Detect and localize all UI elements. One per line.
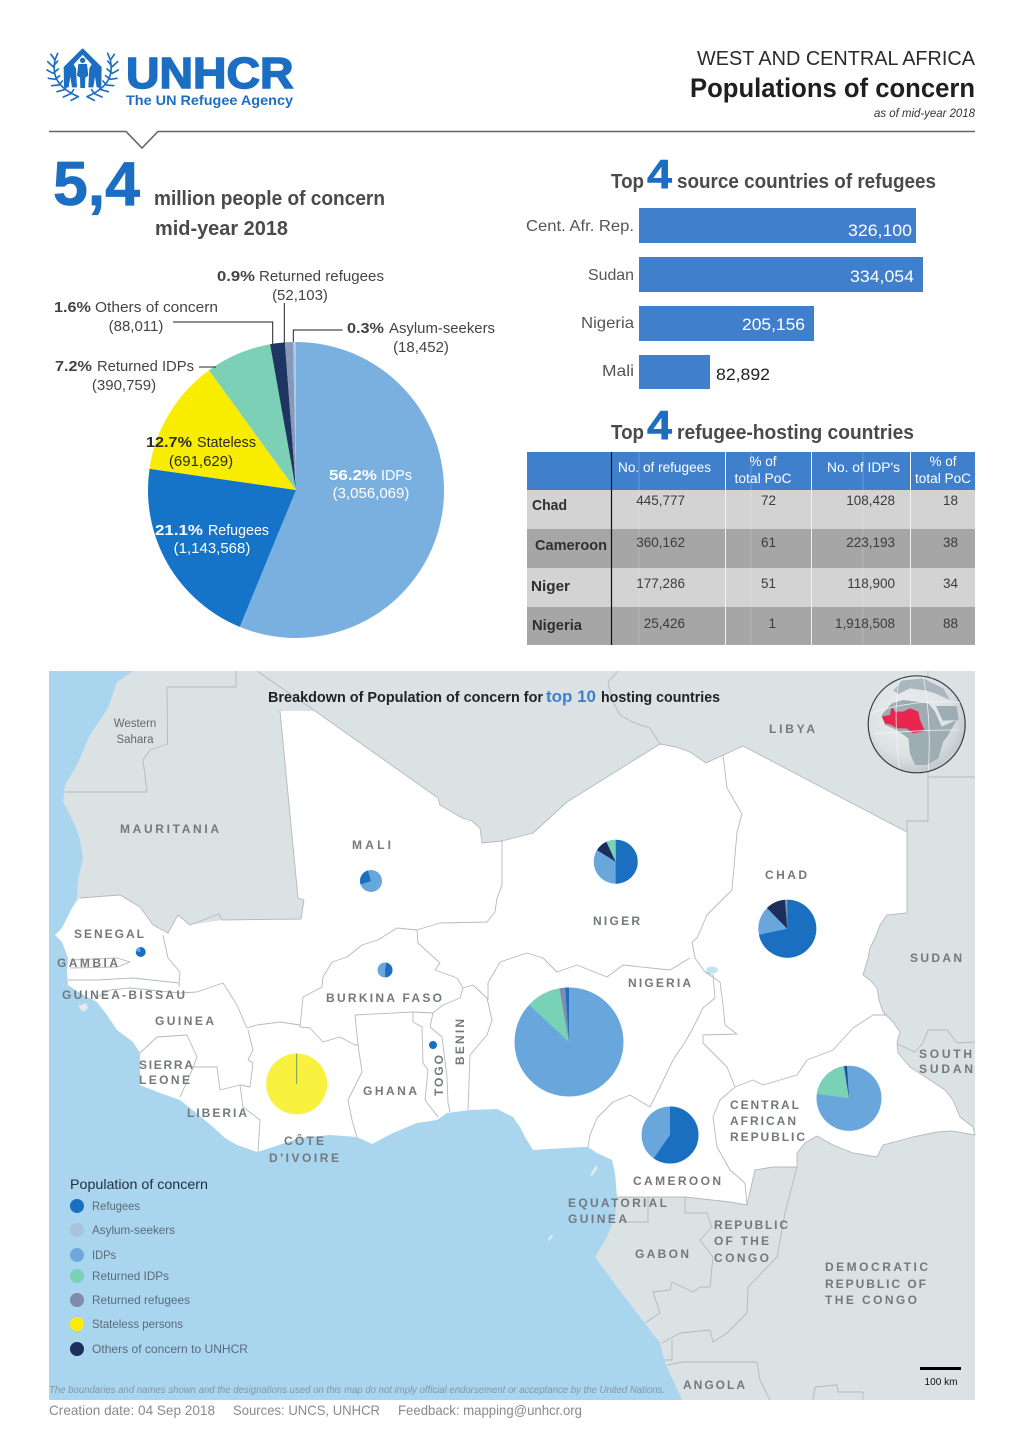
legend item: Returned IDPs: Returned IDPs — [92, 1269, 169, 1283]
country labels: CÔTE — [284, 1133, 324, 1148]
country labels: BURKINA FASO — [326, 991, 442, 1005]
bar: Mali — [602, 355, 770, 389]
legend item: Returned refugees: Returned refugees — [92, 1293, 190, 1307]
country labels: DEMOCRATIC — [825, 1260, 928, 1274]
bar chart heading: top 4 source countries — [611, 151, 936, 197]
country labels: SENEGAL — [74, 927, 144, 941]
bar: Mali: Mali — [602, 363, 634, 380]
country labels: BENIN — [453, 1019, 467, 1065]
logo tagline: The UN Refugee Agency — [126, 92, 293, 108]
map: borders — [65, 671, 975, 1400]
slice: Asylum-seekers — [293, 342, 296, 490]
legend item: Stateless persons: Stateless persons — [92, 1317, 183, 1331]
label: IDPs: 56.2% — [329, 467, 377, 484]
country labels: GABON — [635, 1247, 689, 1261]
country labels: GUINEA — [568, 1212, 627, 1226]
label: Returned refugees — [217, 268, 384, 304]
legend item: Refugees — [70, 1199, 140, 1213]
bar chart heading: top 4 source countries: 4 — [647, 151, 672, 197]
label: Returned refugees: Returned refugees — [259, 268, 384, 285]
legend item: Others of concern: Others of concern to UNHCR — [92, 1342, 248, 1356]
row: Niger: 51 — [761, 576, 776, 591]
footer — [49, 1402, 582, 1418]
label: Returned refugees: (52,103) — [272, 287, 328, 304]
label: Others of concern: (88,011) — [109, 318, 163, 335]
mini pie: Niger — [594, 840, 638, 884]
country labels: REPUBLIC — [714, 1218, 788, 1232]
country labels: GHANA — [363, 1084, 417, 1098]
map panel — [49, 671, 975, 1400]
label: IDPs: IDPs — [381, 467, 412, 484]
bar chart heading: top 4 source countries: source countries of refugees — [677, 170, 936, 193]
row: Nigeria: 88 — [943, 616, 958, 631]
country labels: SUDAN — [919, 1062, 973, 1076]
label: Others of concern: Others of concern — [95, 299, 218, 316]
country labels: SOUTH — [919, 1047, 972, 1061]
country labels: MAURITANIA — [120, 822, 219, 836]
label: Refugees: 21.1% — [155, 522, 203, 539]
leader lines — [173, 303, 343, 367]
country labels: GUINEA — [155, 1014, 214, 1028]
table header text: total PoC — [734, 471, 792, 486]
bar chart heading: top 4 source countries: Top — [611, 170, 644, 193]
table header text: No. of refugees — [618, 460, 711, 475]
legend — [70, 1176, 248, 1356]
country labels: CHAD — [765, 868, 807, 882]
country labels: TOGO — [432, 1055, 446, 1096]
legend item: Refugees: Refugees — [92, 1199, 140, 1213]
row: Cameroon: 38 — [943, 535, 958, 550]
country labels: D'IVOIRE — [269, 1151, 339, 1165]
islands — [78, 1003, 598, 1241]
label: Asylum-seekers: Asylum-seekers — [389, 320, 495, 337]
country labels: LIBYA — [769, 722, 815, 736]
legend item: IDPs — [70, 1248, 116, 1262]
country labels: Western — [114, 718, 156, 730]
bar: Nigeria: Nigeria — [581, 315, 634, 332]
map title: hosting countries — [601, 689, 720, 706]
country labels: NIGER — [593, 914, 640, 928]
map title: Breakdown of Population of concern for — [268, 689, 543, 706]
country labels: GUINEA-BISSAU — [62, 988, 185, 1002]
mini pie: Senegal — [136, 947, 146, 957]
row: Chad: Chad — [532, 497, 567, 514]
label: Asylum-seekers: 0.3% — [347, 320, 384, 337]
date note: as of mid-year 2018 — [874, 108, 976, 120]
footer: Sources: UNCS, UNHCR — [233, 1402, 380, 1418]
key figure date: mid-year 2018 — [155, 217, 288, 240]
slice: Returned refugees — [285, 342, 296, 490]
scale bar: 100 km — [924, 1377, 958, 1388]
mini pie: Chad — [758, 900, 816, 958]
slice: IDPs — [240, 342, 444, 638]
table heading: top 4 hosting countries: 4 — [647, 402, 672, 448]
footer: Feedback: mapping@unhcr.org — [398, 1402, 582, 1418]
label: Stateless: 12.7% — [146, 434, 192, 451]
row: Niger: 177,286 — [636, 576, 685, 591]
row: Nigeria — [532, 616, 958, 634]
country labels: MALI — [352, 838, 391, 852]
table heading: top 4 hosting countries: Top — [611, 421, 644, 444]
table header text: % of — [749, 454, 777, 469]
row: Cameroon: 61 — [761, 535, 776, 550]
label: IDPs — [329, 467, 412, 502]
country labels: CONGO — [714, 1251, 769, 1265]
title block — [690, 47, 976, 120]
row: Cameroon: 360,162 — [636, 535, 685, 550]
country labels: AFRICAN — [730, 1114, 796, 1128]
table: top 4 hosting countries — [527, 452, 975, 645]
slice: Stateless — [150, 370, 296, 490]
label: Refugees — [155, 522, 269, 557]
bar: Nigeria: 205,156 — [742, 315, 805, 334]
legend item: IDPs: IDPs — [92, 1248, 116, 1262]
table header background — [527, 452, 975, 490]
disclaimer: The boundaries and names shown and the designations used on this map do not imply official endorsement or acceptance by the United Nations. — [49, 1384, 665, 1396]
country labels: SUDAN — [910, 951, 962, 965]
row: Chad: 108,428 — [846, 493, 895, 508]
slice: Returned IDPs — [209, 344, 296, 490]
country labels: CENTRAL — [730, 1098, 799, 1112]
row: Niger: 118,900 — [847, 576, 895, 591]
map title — [268, 687, 720, 706]
map land background — [49, 671, 975, 1400]
row: Chad: 445,777 — [636, 493, 685, 508]
row: Cameroon: 223,193 — [846, 535, 895, 550]
logo: UNHCR — [47, 48, 294, 108]
region heading: WEST AND CENTRAL AFRICA — [697, 47, 975, 70]
map: sea — [49, 671, 682, 1400]
row: Nigeria: 1 — [768, 616, 776, 631]
table header text — [618, 454, 971, 486]
row: Chad — [532, 493, 958, 514]
bar: Sudan — [588, 257, 923, 292]
row: Niger: 34 — [943, 576, 958, 591]
mini pie: Burkina Faso — [378, 962, 392, 978]
row: Cameroon: Cameroon — [535, 537, 607, 554]
country labels: GAMBIA — [57, 956, 118, 970]
header rule with notch — [49, 132, 975, 148]
label: Others of concern: 1.6% — [54, 299, 91, 316]
row: Niger: Niger — [531, 578, 570, 595]
bar chart: top 4 source countries — [526, 208, 923, 389]
label: IDPs: (3,056,069) — [333, 485, 409, 502]
mini pie: Cameroon — [642, 1106, 698, 1164]
number 5,4: 5,4 — [53, 150, 141, 219]
pie chart: population breakdown — [54, 268, 495, 638]
key figure caption: million people of concern — [154, 187, 385, 210]
row: Chad: 18 — [943, 493, 958, 508]
scale bar — [920, 1367, 961, 1388]
icon: hands sheltering person within laurel wreath — [47, 48, 118, 100]
bar: Sudan: 334,054 — [850, 267, 914, 286]
row: Chad: 72 — [761, 493, 776, 508]
main title: Populations of concern — [690, 73, 975, 103]
country labels — [57, 718, 973, 1392]
row: Nigeria: 1,918,508 — [835, 616, 895, 631]
mini pie: Mali — [360, 870, 382, 892]
label: Stateless — [146, 434, 256, 470]
mini pie: Togo — [429, 1041, 437, 1049]
mini pie: Cote d'Ivoire — [266, 1054, 327, 1114]
table header text: % of — [929, 454, 957, 469]
mini pie: Central African Republic — [816, 1066, 882, 1131]
country labels: OF THE — [714, 1234, 769, 1248]
country labels: ANGOLA — [683, 1378, 745, 1392]
country labels: REPUBLIC — [730, 1130, 805, 1144]
country labels: CAMEROON — [633, 1174, 721, 1188]
label: Asylum-seekers — [347, 320, 495, 356]
footer: Creation date: 04 Sep 2018 — [49, 1402, 215, 1418]
bar: Central African Republic — [526, 208, 916, 243]
label: Stateless: (691,629) — [169, 453, 233, 470]
bar: Central African Republic: Cent. Afr. Rep. — [526, 218, 634, 235]
label: Refugees: (1,143,568) — [174, 540, 250, 557]
country labels: SIERRA — [139, 1058, 193, 1072]
label: Returned IDPs: Returned IDPs — [97, 358, 194, 375]
label: Refugees: Refugees — [208, 522, 269, 539]
country labels: LEONE — [139, 1073, 190, 1087]
label: Returned IDPs — [55, 358, 194, 394]
Lake Chad — [706, 966, 718, 974]
logo wordmark: UNHCR — [126, 50, 294, 98]
country labels: EQUATORIAL — [568, 1196, 667, 1210]
legend item: Asylum-seekers: Asylum-seekers — [92, 1223, 175, 1237]
row: Nigeria: 25,426 — [644, 616, 685, 631]
country labels: REPUBLIC OF — [825, 1277, 926, 1291]
bar: Sudan: Sudan — [588, 267, 634, 284]
label: Stateless: Stateless — [197, 434, 256, 451]
map title: top 10 — [546, 687, 596, 706]
table header text: total PoC — [915, 471, 971, 486]
map: highlighted region — [50, 711, 975, 1250]
legend title: Population of concern — [70, 1176, 208, 1192]
key figure — [53, 150, 385, 240]
table heading: top 4 hosting countries: refugee-hosting countries — [677, 421, 914, 444]
label: Returned IDPs: (390,759) — [92, 377, 156, 394]
table heading: top 4 hosting countries — [611, 402, 914, 448]
globe locator — [868, 676, 965, 773]
country labels: NIGERIA — [628, 976, 691, 990]
country labels: LIBERIA — [187, 1106, 247, 1120]
slice: Others of concern — [270, 342, 296, 490]
mini pie: Nigeria — [514, 988, 624, 1096]
row: Nigeria: Nigeria — [532, 617, 583, 634]
bar: Mali: 82,892 — [716, 365, 770, 384]
label: Returned refugees: 0.9% — [217, 268, 255, 285]
country labels: THE CONGO — [825, 1293, 917, 1307]
row: Cameroon — [535, 535, 958, 554]
bar: Nigeria — [581, 306, 814, 341]
bar: Central African Republic: 326,100 — [848, 221, 912, 240]
table header text: No. of IDP's — [827, 460, 900, 475]
slice: Refugees — [148, 469, 296, 627]
row: Niger — [531, 576, 958, 595]
country labels: Sahara — [116, 734, 154, 746]
label: Returned IDPs: 7.2% — [55, 358, 92, 375]
label: Others of concern — [54, 299, 218, 335]
label: Asylum-seekers: (18,452) — [393, 339, 449, 356]
